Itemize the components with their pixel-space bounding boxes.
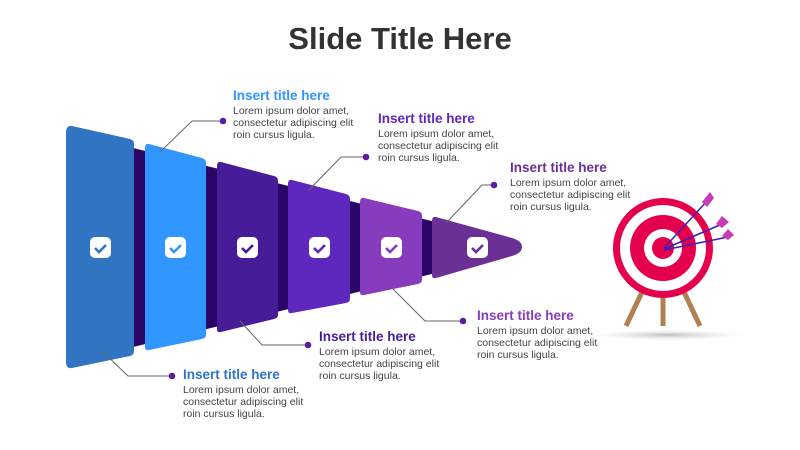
text: Insert title here bbox=[233, 88, 330, 103]
text: Lorem ipsum dolor amet, bbox=[378, 128, 494, 140]
text: roin cursus ligula. bbox=[319, 370, 401, 382]
text: roin cursus ligula. bbox=[233, 129, 315, 141]
segment 4 bbox=[288, 180, 350, 313]
text: Lorem ipsum dolor amet, bbox=[233, 105, 349, 117]
dark backing band bbox=[125, 146, 440, 349]
text: Lorem ipsum dolor amet, bbox=[319, 346, 435, 358]
text: Insert title here bbox=[510, 160, 607, 175]
segment 5 bbox=[360, 198, 422, 295]
text block 1 bbox=[233, 88, 354, 141]
text: consectetur adipiscing elit bbox=[233, 117, 353, 129]
segment 6 bbox=[432, 217, 522, 278]
text: roin cursus ligula. bbox=[510, 201, 592, 213]
title: Slide Title Here bbox=[288, 21, 512, 56]
text: consectetur adipiscing elit bbox=[378, 140, 498, 152]
text: Insert title here bbox=[183, 367, 280, 382]
connector lines bbox=[101, 121, 494, 376]
text block 6 bbox=[183, 367, 304, 420]
text: Insert title here bbox=[477, 308, 574, 323]
text: consectetur adipiscing elit bbox=[510, 189, 630, 201]
text block 2 bbox=[378, 111, 498, 164]
text: roin cursus ligula. bbox=[183, 408, 265, 420]
text: Insert title here bbox=[319, 329, 416, 344]
text: Insert title here bbox=[378, 111, 475, 126]
text: roin cursus ligula. bbox=[378, 152, 460, 164]
text: consectetur adipiscing elit bbox=[319, 358, 439, 370]
text: consectetur adipiscing elit bbox=[183, 396, 303, 408]
text: Lorem ipsum dolor amet, bbox=[477, 325, 593, 337]
segment 2 bbox=[145, 144, 206, 350]
text: Lorem ipsum dolor amet, bbox=[183, 384, 299, 396]
icon: target with arrows bbox=[584, 192, 734, 339]
segment 1 bbox=[66, 126, 134, 368]
text: consectetur adipiscing elit bbox=[477, 337, 597, 349]
text: roin cursus ligula. bbox=[477, 349, 559, 361]
segment 3 bbox=[217, 162, 278, 332]
text block 4 bbox=[477, 308, 598, 361]
text block 5 bbox=[319, 329, 440, 382]
text block 3 bbox=[510, 160, 630, 213]
text: Lorem ipsum dolor amet, bbox=[510, 177, 626, 189]
